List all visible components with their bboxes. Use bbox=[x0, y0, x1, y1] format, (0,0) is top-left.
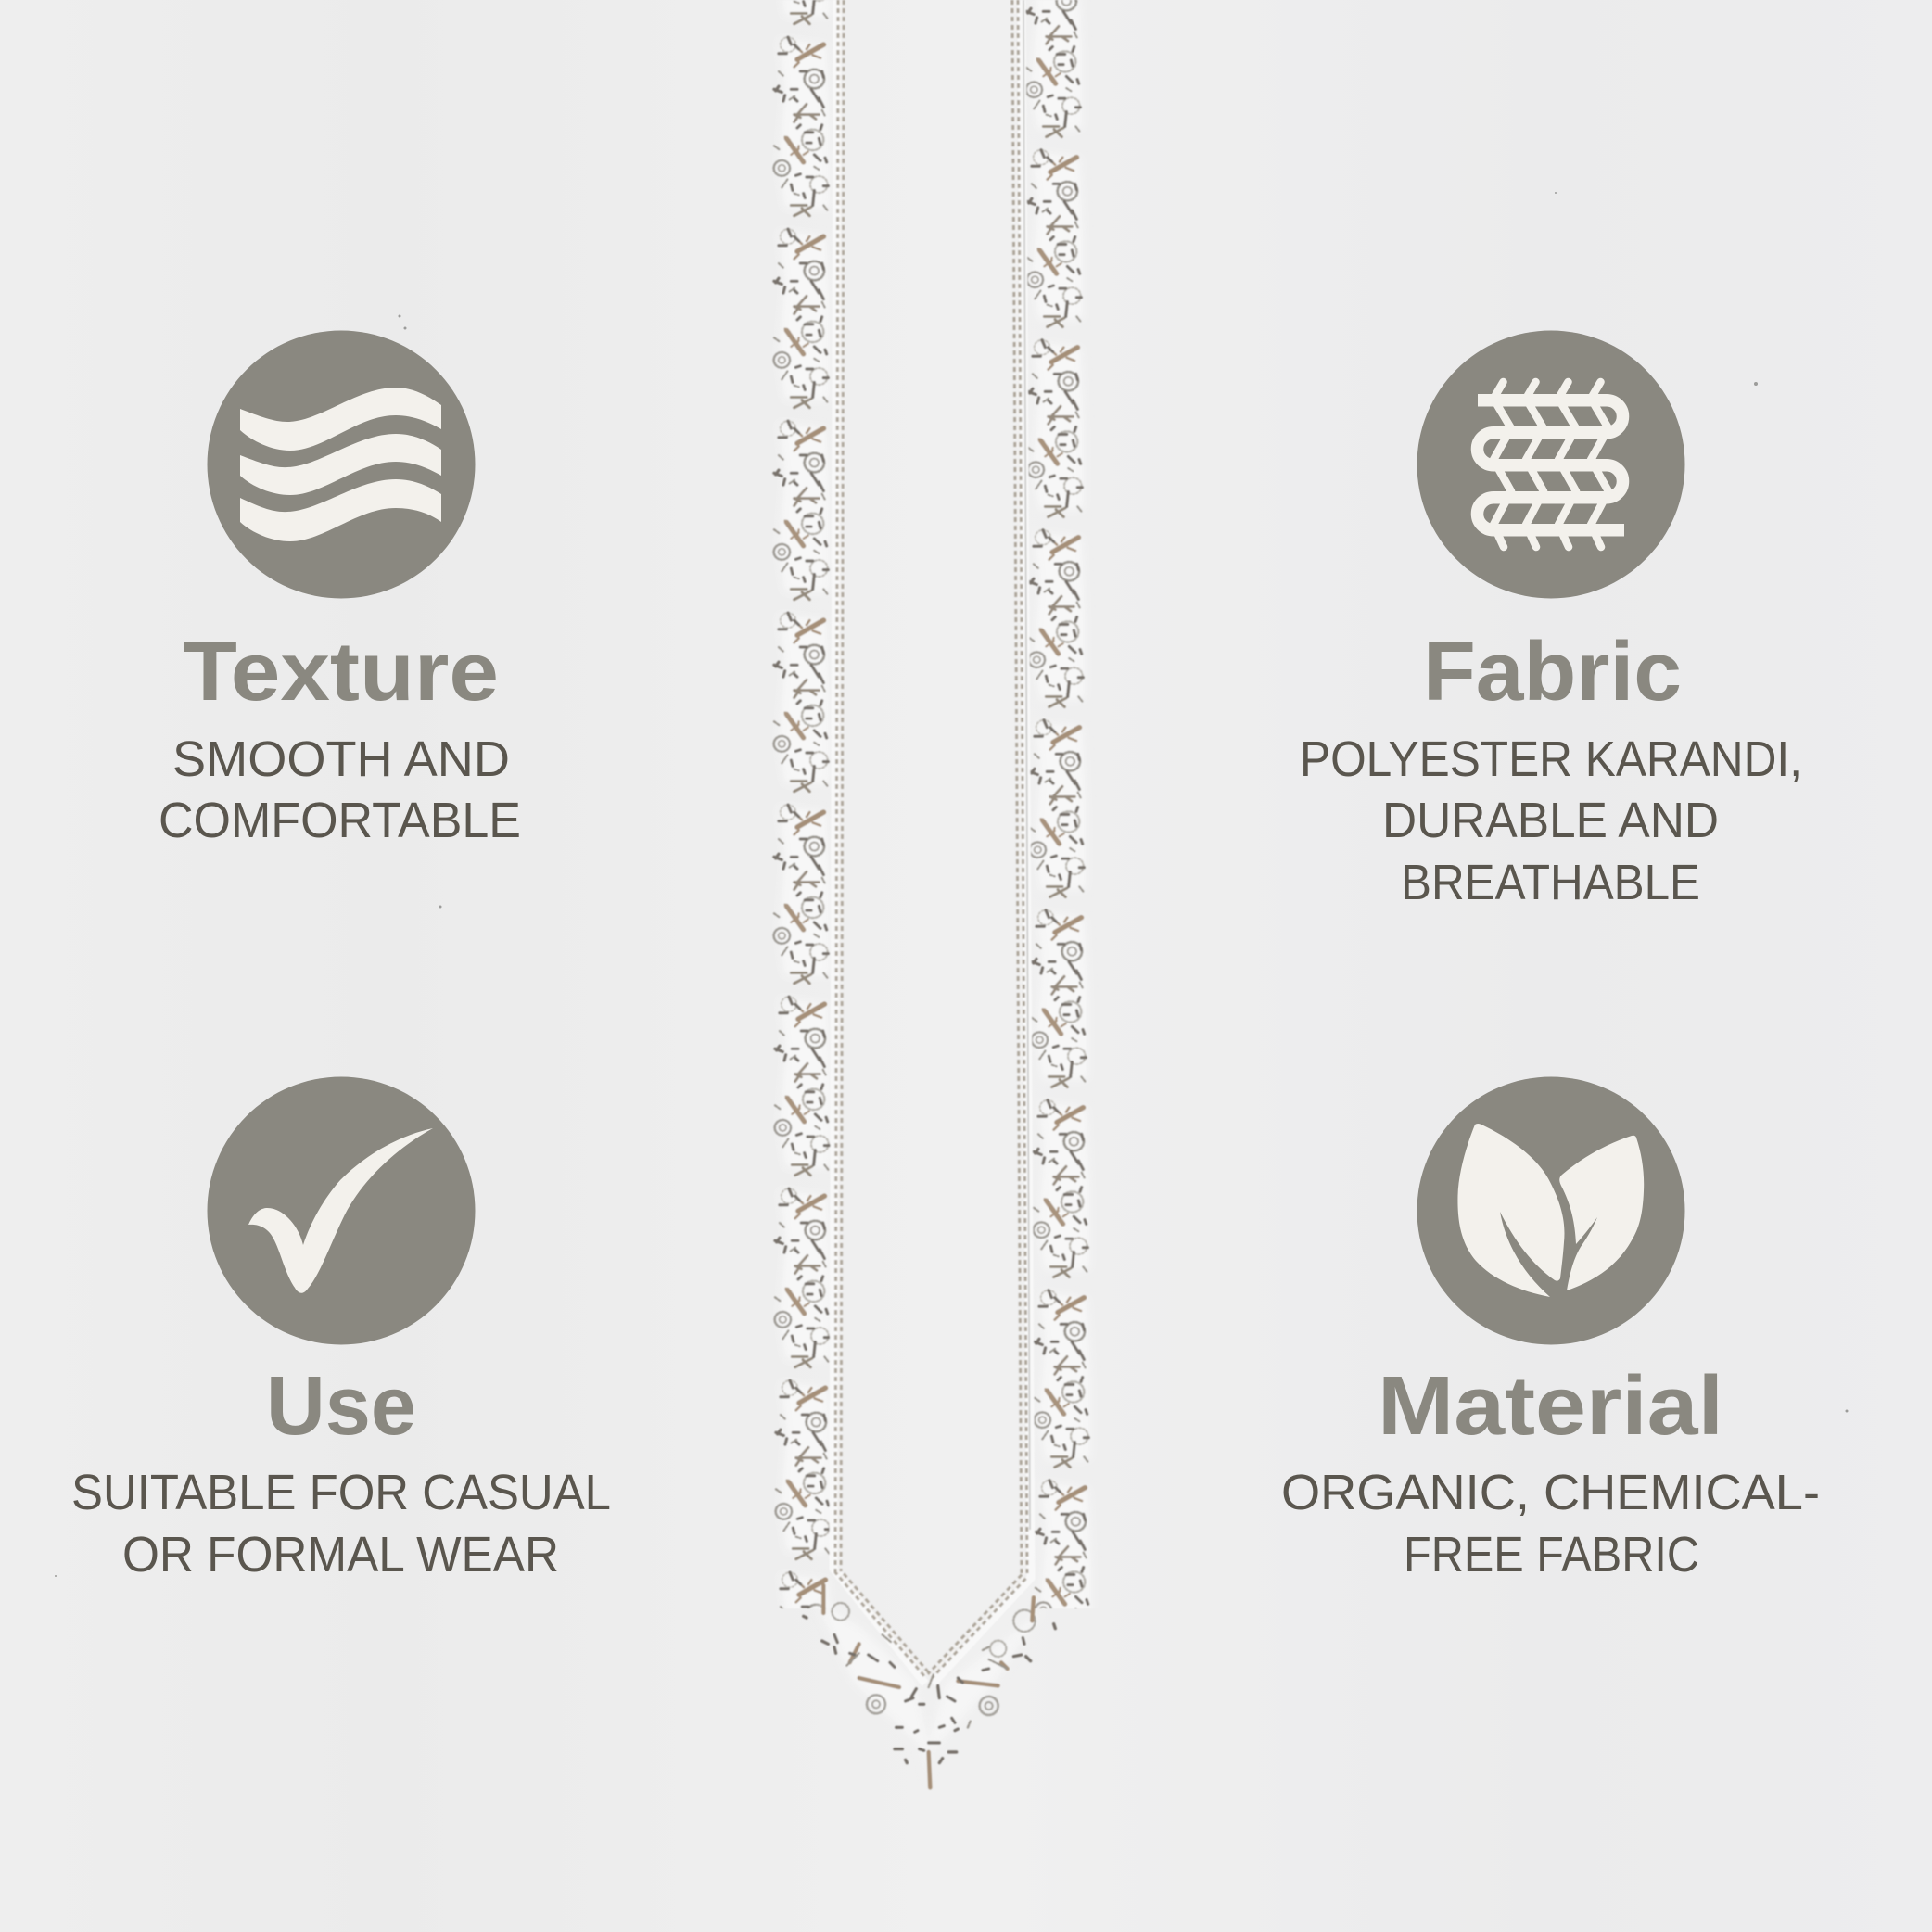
text: texture description: SMOOTH AND bbox=[172, 731, 510, 787]
text: fabric description: BREATHABLE bbox=[1401, 855, 1700, 910]
text: material description: FREE FABRIC bbox=[1404, 1527, 1699, 1582]
text: fabric description bbox=[1300, 731, 1802, 910]
panel: fabric bbox=[1300, 330, 1802, 910]
text: fabric description: DURABLE AND bbox=[1382, 793, 1719, 848]
text: texture description: COMFORTABLE bbox=[159, 793, 521, 848]
embroidery: V-shaped tip bbox=[804, 1585, 1055, 1787]
icon: leaves bbox=[1417, 1077, 1685, 1344]
heading: Texture: Texture bbox=[183, 626, 499, 718]
icon: knit weave bbox=[1417, 330, 1685, 599]
heading: Material: Material bbox=[1378, 1360, 1723, 1453]
embroidery: left floral strip bbox=[774, 0, 832, 1751]
icon: waves bbox=[208, 330, 475, 599]
panel: use bbox=[71, 1077, 611, 1582]
text: texture description bbox=[159, 731, 521, 848]
text: fabric description: POLYESTER KARANDI, bbox=[1300, 731, 1802, 787]
text: material description: ORGANIC, CHEMICAL- bbox=[1281, 1465, 1820, 1520]
embroidery: left and right chain borders bbox=[833, 0, 1031, 1684]
text: use description bbox=[71, 1465, 611, 1582]
heading: Fabric: Fabric bbox=[1423, 626, 1682, 718]
embroidery: right floral strip bbox=[1026, 0, 1091, 1658]
embroidery: central placket bbox=[774, 0, 1091, 1787]
panel: material bbox=[1281, 1077, 1820, 1582]
heading: Use: Use bbox=[266, 1360, 416, 1453]
text: material description bbox=[1281, 1465, 1820, 1582]
text: use description: SUITABLE FOR CASUAL bbox=[71, 1465, 611, 1520]
panel: texture bbox=[159, 330, 521, 848]
text: use description: OR FORMAL WEAR bbox=[122, 1527, 559, 1582]
fabric speckles bbox=[55, 192, 1849, 1577]
icon: check mark bbox=[208, 1077, 475, 1344]
